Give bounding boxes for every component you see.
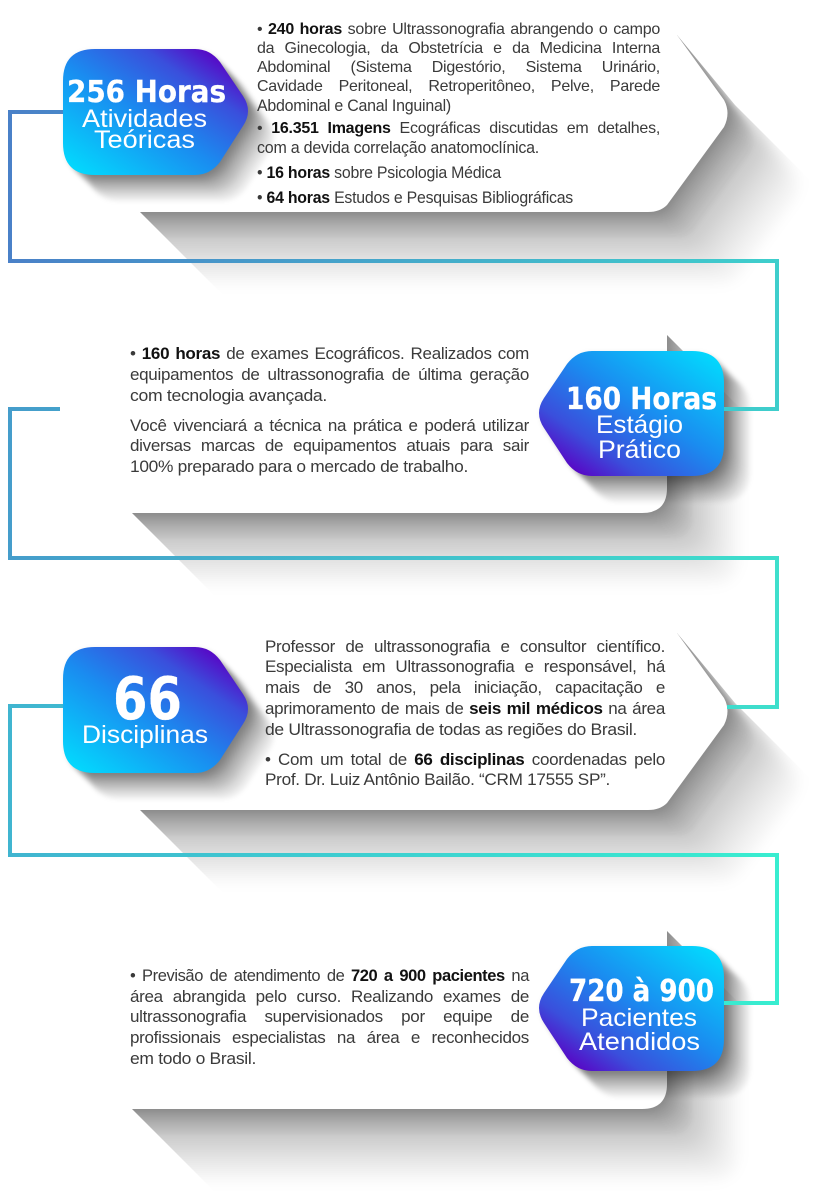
text block: teoria: da Ginecologia, da Obstetrícia e da Medicina Interna <box>257 40 660 57</box>
text block: pacientes <box>130 967 530 1068</box>
text block: estagio: diversas marcas de equipamentos atuais para sair <box>130 436 529 455</box>
badge: 256 horas: 256 Horas <box>67 75 226 110</box>
panel: teoria <box>140 35 728 212</box>
badge: 256 horas: Teóricas <box>94 126 195 154</box>
text block: disciplinas: de Ultrassonografia de todas as regiões do Brasil. <box>265 720 637 739</box>
panel: disciplinas <box>140 633 728 810</box>
badge: 66 disciplinas: 66 <box>113 664 182 733</box>
text block: disciplinas: Especialista em Ultrassonografia e responsável, há <box>265 657 665 676</box>
badge: 720 a 900: Atendidos <box>579 1028 700 1056</box>
text block: teoria: • 240 horas sobre Ultrassonografia abrangendo o campo <box>257 21 660 38</box>
badge: 66 disciplinas <box>63 647 248 773</box>
badge: 160 horas: 160 Horas <box>566 382 717 417</box>
text block: pacientes: em todo o Brasil. <box>130 1049 256 1068</box>
text block: disciplinas: • Com um total de 66 disciplinas coordenadas pelo <box>265 750 665 769</box>
connector line: disciplines to patients <box>10 706 777 1003</box>
text block: teoria <box>257 21 660 207</box>
badge: 256 horas <box>63 49 248 175</box>
text block: teoria: Abdominal e Canal Inguinal) <box>257 96 451 115</box>
text block: disciplinas <box>265 637 666 789</box>
text block: estagio: • 160 horas de exames Ecográficos. Realizados com <box>130 344 529 363</box>
text block: estagio <box>130 344 529 476</box>
text block: estagio: 100% preparado para o mercado de trabalho. <box>130 457 468 476</box>
text block: estagio: Você vivenciará a técnica na prática e poderá utilizar <box>130 416 529 435</box>
text block: teoria: com a devida correlação anatomoclínica. <box>257 138 539 157</box>
text block: pacientes: área abrangida pelo curso. Realizando exames de <box>130 987 529 1006</box>
badge: 66 disciplinas: Disciplinas <box>82 721 208 749</box>
panel: estagio <box>132 335 667 513</box>
connector line: theory to internship <box>10 112 777 409</box>
text block: teoria: • 64 horas Estudos e Pesquisas Bibliográficas <box>257 188 573 207</box>
text block: disciplinas: Professor de ultrassonografia e consultor científico. <box>265 637 665 656</box>
connector line: internship to disciplines <box>10 409 777 707</box>
panel: pacientes <box>132 931 667 1109</box>
text block: estagio: equipamentos de ultrassonografia de última geração <box>130 365 529 384</box>
text block: pacientes: ultrassonografia supervisionados por equipe de <box>130 1007 529 1026</box>
text block: disciplinas: aprimoramento de mais de seis mil médicos na área <box>265 699 665 718</box>
badge: 720 a 900: Pacientes <box>581 1004 697 1032</box>
badge: 256 horas: Atividades <box>82 105 207 133</box>
text block: teoria: • 16 horas sobre Psicologia Médica <box>257 163 502 182</box>
badge: 160 horas: Prático <box>598 436 681 464</box>
text block: disciplinas: Prof. Dr. Luiz Antônio Bailão. “CRM 17555 SP”. <box>265 770 610 789</box>
text block: teoria: Cavidade Peritoneal, Retroperitôneo, Pelve, Parede <box>257 78 660 95</box>
text block: disciplinas: mais de 30 anos, pela iniciação, capacitação e <box>265 678 665 697</box>
text block: pacientes: • Previsão de atendimento de 720 a 900 pacientes na <box>130 967 529 985</box>
text block: teoria: • 16.351 Imagens Ecográficas discutidas em detalhes, <box>257 120 660 137</box>
badge: 720 a 900: 720 à 900 <box>569 974 714 1009</box>
badge: 160 horas <box>539 351 724 476</box>
text block: pacientes: profissionais especialistas na área e reconhecidos <box>130 1028 529 1047</box>
text block: estagio: com tecnologia avançada. <box>130 386 327 405</box>
text block: teoria: Abdominal (Sistema Digestório, Sistema Urinário, <box>257 59 660 76</box>
badge: 160 horas: Estágio <box>596 411 683 439</box>
badge: 720 a 900 <box>539 946 724 1071</box>
